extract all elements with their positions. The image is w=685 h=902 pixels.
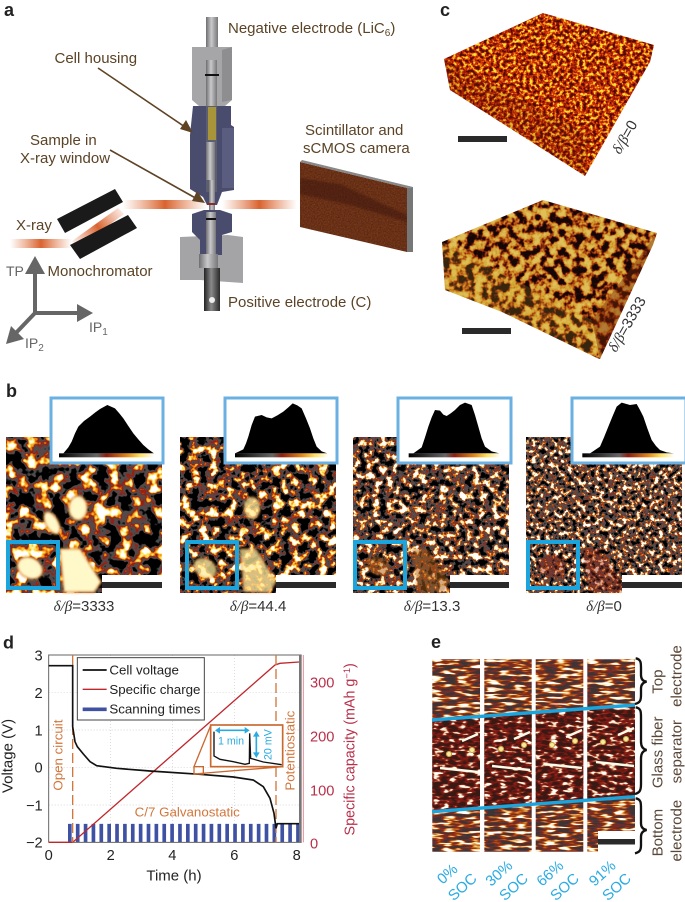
scale bar e bbox=[598, 831, 636, 853]
coordinate axes bbox=[6, 256, 108, 354]
annotation: potentiostatic: Potentiostatic bbox=[283, 710, 298, 791]
left y-axis ticks: 2 bbox=[35, 686, 43, 702]
annotation: galvanostatic: C/7 Galvanostatic bbox=[135, 805, 240, 820]
zoom inset bbox=[194, 725, 283, 774]
label: cell housing: Cell housing bbox=[54, 50, 137, 67]
right y-axis ticks: 0 bbox=[310, 837, 318, 853]
axes frame bbox=[49, 655, 303, 842]
specific charge line bbox=[49, 662, 299, 842]
slice: 3333 bbox=[6, 398, 163, 593]
label: scintillator and camera: sCMOS camera bbox=[303, 140, 410, 157]
panel letter b: b bbox=[6, 381, 17, 401]
legend: Cell voltage bbox=[109, 662, 179, 677]
particle blobs bbox=[14, 496, 101, 592]
slice: 44.4 bbox=[180, 398, 337, 593]
scanning times bars bbox=[68, 805, 299, 860]
caption 3333: δ/β=3333 bbox=[54, 598, 114, 615]
left y-axis ticks: −2 bbox=[26, 836, 43, 852]
label: sample in X-ray window: X-ray window bbox=[20, 150, 110, 167]
cube: delta/beta 0 bbox=[440, 10, 660, 180]
label: delta/beta 3333: δ/β=3333 bbox=[605, 294, 650, 355]
label: negative electrode: Negative electrode (LiC bbox=[228, 20, 385, 37]
coordinate axes: 1 bbox=[102, 327, 108, 338]
scintillator and camera bbox=[298, 158, 413, 254]
x-axis ticks: 2 bbox=[107, 848, 115, 864]
panel c: 3D renderings bbox=[440, 0, 660, 362]
phase dashes bbox=[73, 655, 276, 842]
panel a: experimental setup bbox=[4, 0, 413, 354]
x-axis ticks: 8 bbox=[293, 848, 301, 864]
interface lines bbox=[432, 705, 635, 812]
panel letter e: e bbox=[431, 632, 441, 652]
label: delta/beta 0: δ/β=0 bbox=[609, 118, 641, 157]
arrow: cell housing bbox=[98, 68, 193, 133]
right y-axis ticks: 100 bbox=[310, 783, 334, 799]
coordinate axes: TP bbox=[6, 263, 24, 279]
right y-axis title: ) bbox=[343, 663, 359, 668]
histograms right bbox=[409, 403, 674, 457]
coordinate axes: IP bbox=[89, 319, 102, 335]
labels and braces bbox=[434, 645, 685, 902]
section labels: Bottom bbox=[650, 809, 667, 856]
SOC labels: 91% bbox=[586, 857, 619, 890]
right y-axis title: −1 bbox=[342, 668, 352, 679]
left y-axis ticks: 0 bbox=[35, 761, 43, 777]
label: positive electrode: Positive electrode (C) bbox=[228, 294, 371, 311]
arrow: sample bbox=[110, 150, 205, 203]
x-axis ticks: 4 bbox=[168, 848, 176, 864]
cell assembly bbox=[180, 17, 243, 311]
SOC labels: 0% bbox=[434, 861, 461, 888]
panel letter d: d bbox=[3, 632, 14, 652]
right y-axis ticks: 300 bbox=[310, 675, 334, 691]
section labels: Top bbox=[650, 670, 667, 694]
x-axis ticks: 6 bbox=[230, 848, 238, 864]
section labels bbox=[650, 645, 685, 861]
left y-axis title: Voltage (V) bbox=[0, 719, 17, 793]
panel b: phase contrast slices bbox=[6, 381, 685, 615]
legend: Specific charge bbox=[109, 682, 200, 697]
panel letter a: a bbox=[4, 0, 15, 20]
scale bar c bottom bbox=[462, 328, 511, 334]
caption 13.3: δ/β=13.3 bbox=[404, 598, 460, 615]
x-ray beam segments bbox=[10, 200, 297, 248]
x-axis ticks bbox=[45, 848, 301, 864]
monochromator crystals bbox=[57, 189, 137, 259]
scale bar c top bbox=[458, 136, 507, 142]
left y-axis ticks: 1 bbox=[35, 723, 43, 739]
section labels: Glass fiber bbox=[650, 717, 667, 788]
legend: Scanning times bbox=[109, 702, 201, 717]
slice: 0 bbox=[526, 398, 685, 593]
label: X-ray: X-ray bbox=[16, 217, 52, 234]
slice columns bbox=[430, 657, 637, 854]
label: scintillator and camera: Scintillator and bbox=[305, 122, 403, 139]
cell voltage line bbox=[49, 666, 299, 828]
right y-axis ticks: 200 bbox=[310, 729, 334, 745]
slice: 13.3 bbox=[353, 398, 511, 593]
zoom inset: 1 min bbox=[218, 735, 244, 747]
left y-axis ticks: −1 bbox=[26, 798, 43, 814]
label: sample in X-ray window: Sample in bbox=[30, 132, 97, 149]
annotation: open circuit: Open circuit bbox=[51, 719, 66, 791]
right y-axis title: Specific capacity (mAh g bbox=[343, 679, 359, 835]
SOC labels bbox=[434, 857, 635, 902]
left y-axis ticks: 3 bbox=[35, 649, 43, 665]
left y-axis ticks bbox=[26, 649, 43, 852]
bright fibers bbox=[440, 728, 634, 772]
caption 0: δ/β=0 bbox=[586, 598, 622, 615]
panel e: SOC slices bbox=[430, 632, 685, 902]
coordinate axes: 2 bbox=[38, 343, 44, 354]
right y-axis ticks bbox=[310, 675, 334, 853]
coordinate axes: IP bbox=[25, 335, 38, 351]
x-axis title: Time (h) bbox=[146, 868, 202, 885]
label: negative electrode: 6 bbox=[385, 28, 391, 39]
label: negative electrode: ) bbox=[390, 20, 395, 37]
legend bbox=[77, 658, 204, 720]
grid bbox=[49, 655, 299, 842]
panel letter c: c bbox=[440, 0, 450, 20]
SOC labels: 30% bbox=[482, 857, 516, 890]
x-axis ticks: 0 bbox=[45, 848, 53, 864]
zoom inset: 20 mV bbox=[263, 728, 275, 760]
label: monochromator: Monochromator bbox=[48, 263, 153, 280]
histograms bbox=[59, 403, 328, 457]
panel d: voltage chart bbox=[0, 632, 359, 885]
caption 44.4: δ/β=44.4 bbox=[230, 598, 286, 615]
braces bbox=[635, 658, 647, 853]
SOC labels: 66% bbox=[533, 857, 567, 890]
cube: delta/beta 3333 bbox=[440, 198, 660, 362]
